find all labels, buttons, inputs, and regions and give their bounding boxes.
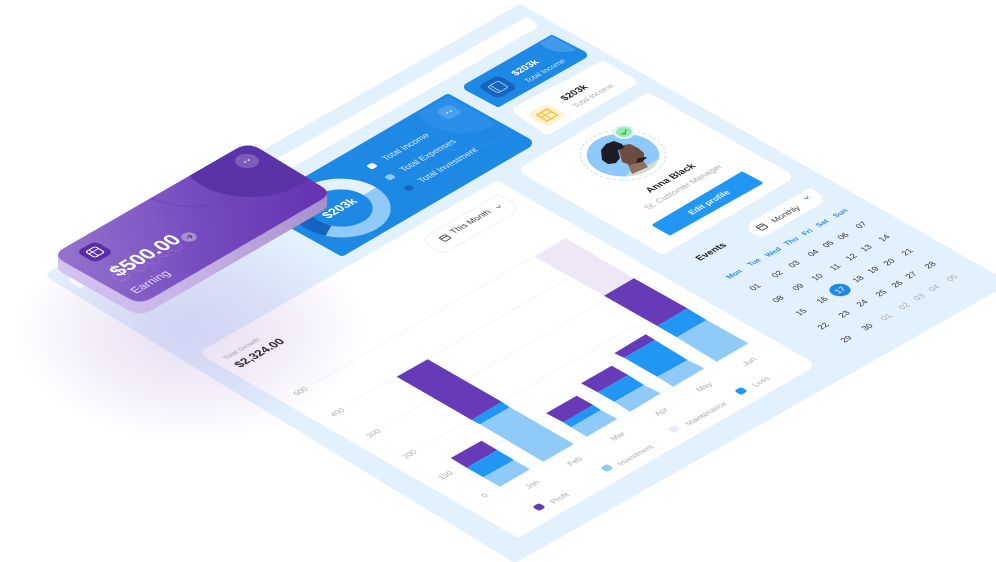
calendar dates: 05: [944, 273, 961, 283]
label: Total Income: [570, 82, 616, 109]
calendar dates: 22: [815, 321, 832, 331]
panel: top search bar: [72, 20, 534, 285]
calendar dates: 18: [850, 274, 867, 284]
calendar dates: 25: [873, 288, 890, 298]
legend: profit: Profit: [548, 491, 572, 505]
x axis labels: Apr: [652, 406, 671, 417]
legend: maintenance: [667, 400, 729, 433]
calendar dates: 04: [926, 283, 943, 293]
calendar dates: 26: [889, 279, 906, 289]
y axis labels: 200: [400, 448, 420, 460]
calendar dates: 29: [838, 334, 855, 344]
donut chart: [284, 174, 398, 242]
card top: [58, 146, 327, 302]
calendar dates: 04: [805, 248, 822, 258]
calendar dates: 03: [911, 292, 928, 302]
legend: total investment: Total Investment: [415, 146, 481, 184]
label: Earning: [127, 269, 174, 296]
calendar dates: 23: [836, 309, 853, 319]
x axis labels: Jan: [523, 479, 542, 490]
filter pill: monthly: [755, 195, 816, 231]
y axis labels: [291, 385, 491, 499]
decorative arc: [540, 36, 576, 52]
icon: up arrow badge: [178, 230, 200, 244]
avatar: [586, 134, 660, 176]
weekday headers: Tue: [745, 257, 763, 268]
label: Total Income: [522, 57, 568, 84]
calendar dates: 16: [814, 295, 831, 305]
verified badge: [613, 125, 635, 139]
x axis labels: Jun: [740, 356, 759, 367]
icon: menu dots: [435, 104, 463, 120]
calendar dates: 13: [858, 243, 875, 253]
amount: $500.00: [105, 232, 187, 280]
calendar dates: 08: [770, 294, 787, 304]
calendar dates: 12: [843, 252, 860, 262]
y axis labels: 100: [436, 469, 456, 481]
filter pill: this month: This Month: [447, 208, 493, 235]
calendar dates: 01: [747, 282, 764, 292]
bar: Apr: [581, 366, 661, 412]
icon: window: [477, 75, 519, 99]
weekday headers: Thu: [781, 235, 801, 247]
weekday headers: Fri: [799, 227, 815, 237]
panel: growth chart: [208, 186, 807, 532]
calendar dates: 28: [922, 260, 939, 270]
calendar dates: 09: [790, 282, 807, 292]
total growth value: $2,324.00: [231, 337, 288, 370]
card glow shadow: [15, 218, 365, 442]
calendar dates: 05: [820, 239, 837, 249]
icon: building: [526, 103, 568, 127]
calendar dates: 21: [899, 247, 916, 257]
calendar dates: [747, 220, 961, 344]
calendar dates: 11: [827, 262, 843, 272]
bar: Feb: [397, 359, 574, 462]
decorative arc: [388, 96, 511, 150]
x axis labels: Feb: [565, 455, 585, 467]
icon: wallet: [76, 241, 114, 263]
calendar dates: 07: [853, 220, 870, 230]
legend: total income: [366, 132, 432, 170]
button: edit profile: [654, 173, 761, 234]
calendar dates: 19: [865, 265, 882, 275]
calendar dates: 02: [896, 301, 913, 311]
avatar ring: [563, 119, 683, 191]
card side: [58, 158, 327, 314]
icon: menu dots: [230, 151, 264, 171]
calendar dates: 02: [769, 269, 786, 279]
weekday headers: Sun: [830, 207, 850, 219]
calendar dates: 24: [854, 298, 871, 308]
legend: maintenance: Maintenance: [683, 400, 729, 427]
bar: Mar: [546, 396, 617, 437]
calendar dates: 03: [786, 259, 803, 269]
value: $203k: [509, 58, 543, 78]
panel: white income stat: [517, 65, 632, 131]
legend: total income: Total Income: [379, 132, 432, 162]
bar: May: [614, 334, 704, 387]
bar: Jan: [451, 441, 530, 487]
value: $203k: [558, 83, 592, 103]
weekday headers: [724, 207, 850, 280]
calendar dates: 14: [876, 233, 893, 243]
legend: loss: Loss: [750, 375, 772, 388]
legend: investment: Investment: [615, 443, 656, 467]
amount reflection: [113, 243, 182, 280]
calendar dates: 17: [832, 285, 849, 295]
weekday headers: Wed: [762, 246, 784, 258]
calendar dates: 20: [881, 257, 898, 267]
donut value: $203k: [319, 196, 361, 221]
y axis labels: 0: [479, 492, 491, 499]
selected date marker: [825, 281, 855, 299]
legend: total expenses: Total Expenses: [397, 137, 459, 173]
panel: blue total card: [292, 94, 532, 256]
calendar dates: 15: [793, 307, 810, 317]
legend: profit: [532, 491, 572, 511]
bar: Jun: [535, 238, 748, 362]
weekday headers: Sat: [813, 218, 831, 228]
y axis labels: 300: [364, 427, 384, 439]
x axis labels: May: [694, 381, 715, 393]
calendar dates: 10: [809, 272, 826, 282]
decorative arcs: [150, 146, 308, 207]
legend: total investment: [403, 146, 481, 192]
heading: events: Events: [693, 241, 730, 263]
calendar dates: 01: [878, 312, 895, 322]
legend: total expenses: [384, 137, 459, 181]
panel: profile: [526, 98, 786, 249]
weekday headers: Mon: [724, 268, 745, 280]
calendar dates: 06: [835, 231, 852, 241]
button: edit profile: Edit profile: [685, 189, 733, 216]
filter pill: monthly: Monthly: [768, 204, 803, 224]
panel: events calendar: [693, 195, 961, 344]
y axis labels: 400: [328, 406, 348, 418]
filter pill: this month: [434, 203, 508, 245]
calendar dates: 30: [859, 322, 876, 332]
legend: investment: [600, 443, 656, 472]
legend: loss: [734, 375, 772, 395]
x axis labels: [523, 356, 759, 490]
name: Anna Black: [643, 162, 699, 195]
total growth label: Total Growth: [221, 337, 263, 361]
x axis labels: Mar: [608, 430, 628, 442]
y axis labels: 500: [291, 385, 311, 397]
panel: blue income stat: [464, 35, 587, 107]
calendar dates: 27: [903, 270, 920, 280]
role: St. Customer Manager: [641, 163, 725, 211]
panel: purple earning card: [58, 146, 327, 314]
